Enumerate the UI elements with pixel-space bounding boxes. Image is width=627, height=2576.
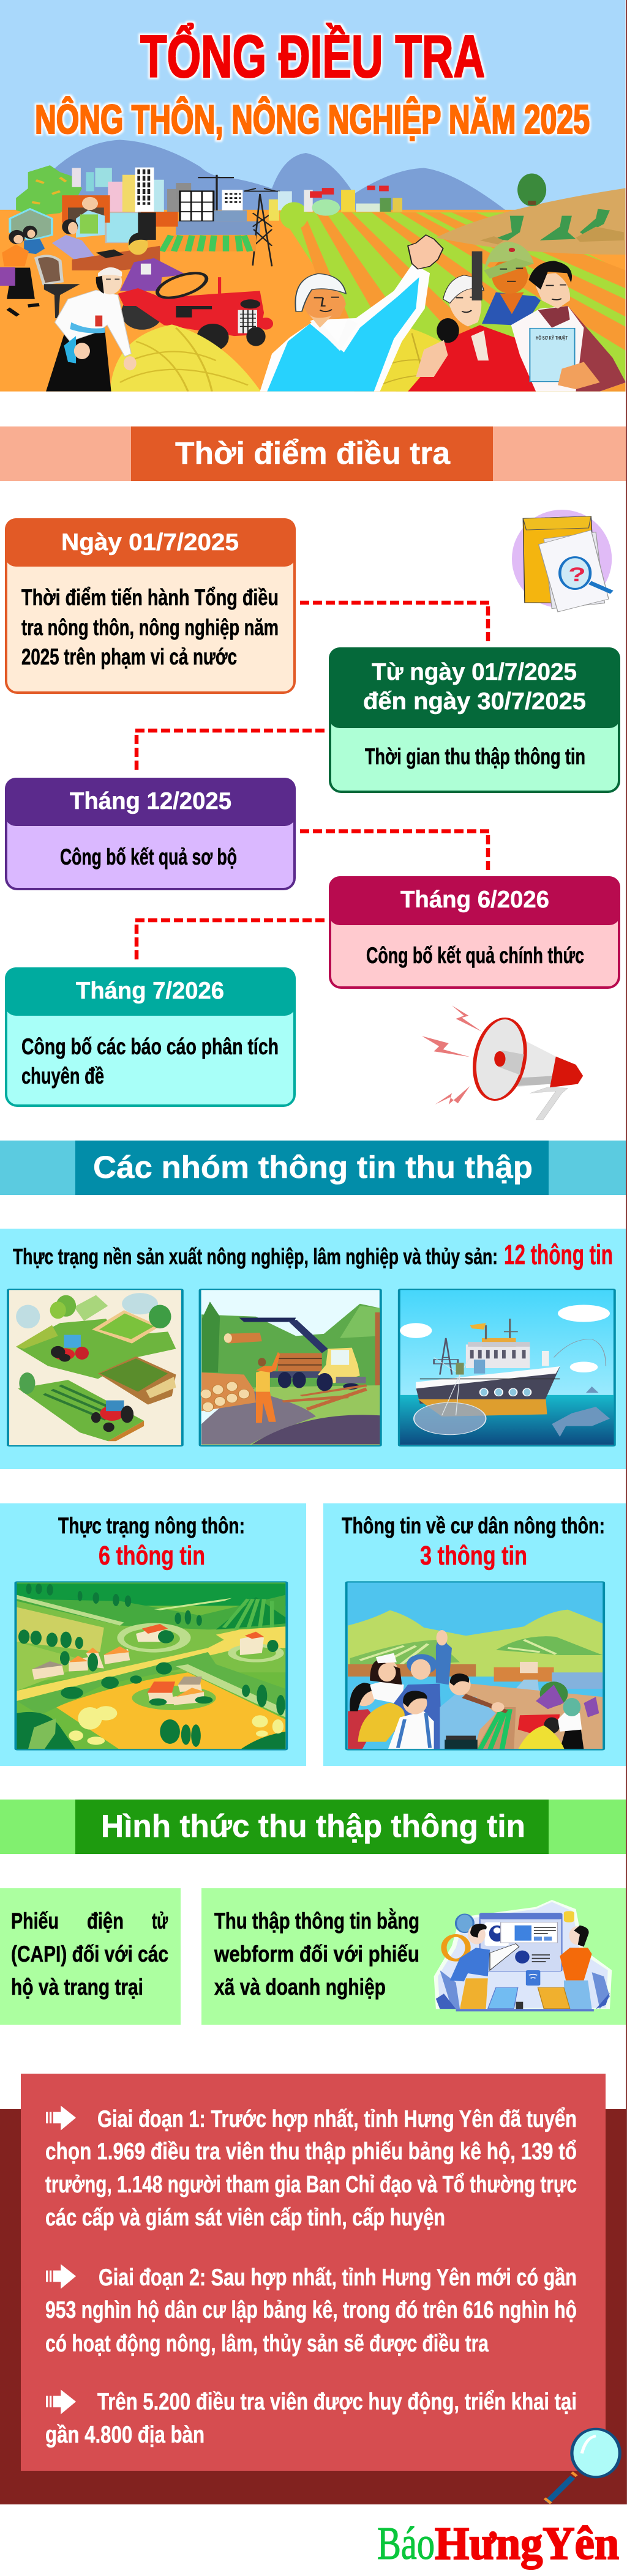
heading band: collection methods bbox=[0, 1800, 626, 1854]
panel: webform: Thu thập thông tin bằng bbox=[214, 1908, 419, 1934]
heading band: information groups bbox=[0, 1141, 626, 1195]
illustration: team with web screens bbox=[434, 1900, 612, 2011]
illustration: fishing ship bbox=[399, 1289, 615, 1446]
icon: arrow 2 bbox=[46, 2264, 76, 2289]
panel: CAPI bbox=[0, 1888, 181, 2025]
connector: dashed line 1 bbox=[300, 603, 490, 643]
panel: webform bbox=[201, 1888, 626, 2025]
card: 7/2026: Tháng 7/2026 bbox=[76, 978, 224, 1004]
illustration: rural residents bbox=[347, 1582, 604, 1750]
card: 01/7/2025: Ngày 01/7/2025 bbox=[61, 529, 239, 556]
icon: envelope with magnifier: ? bbox=[568, 564, 586, 586]
card: 12/2025: Công bố kết quả sơ bộ bbox=[60, 844, 237, 869]
card: 01/7 to 30/7/2025 bbox=[329, 647, 620, 792]
panel: CAPI: Phiếu bbox=[11, 1908, 59, 1934]
text: phase 1: các cấp và giám sát viên cấp tỉnh, cấp huyện bbox=[45, 2205, 445, 2231]
illustration: forestry bbox=[200, 1289, 381, 1446]
panel: rural status 6 info bbox=[0, 1503, 306, 1766]
icon: megaphone bbox=[422, 1005, 583, 1120]
icon: envelope with magnifier bbox=[512, 510, 612, 612]
icon: magnifying glass bbox=[545, 2429, 620, 2503]
illustration: village bbox=[15, 1582, 287, 1750]
card: 01/7/2025 bbox=[5, 518, 296, 693]
text: rural status heading: Thực trạng nông thôn: bbox=[58, 1513, 245, 1538]
illustration: hero banner scene bbox=[0, 0, 627, 393]
panel: webform: webform đối với phiếu bbox=[214, 1941, 419, 1967]
text: phase 2: có hoạt động nông, lâm, thủy sản sẽ được điều tra bbox=[45, 2331, 489, 2357]
connector: dashed line 3 bbox=[300, 831, 490, 871]
icon: arrow 3 bbox=[46, 2389, 76, 2414]
text: phase 2 bbox=[45, 2265, 577, 2357]
panel: CAPI: hộ và trang trại bbox=[11, 1975, 143, 2000]
text: 6 info: 6 thông tin bbox=[99, 1541, 205, 1571]
illustration: farmland bbox=[8, 1289, 182, 1446]
heading band: timing bbox=[0, 426, 626, 481]
panel: rural residents 3 info bbox=[323, 1503, 626, 1766]
logo: Báo Hưng Yên: HưngYên bbox=[435, 2518, 619, 2569]
card: 7/2026: Công bố các báo cáo phân tích bbox=[21, 1034, 279, 1059]
connector: dashed line 4 bbox=[135, 920, 325, 961]
panel: CAPI: điện bbox=[87, 1908, 124, 1934]
panel: CAPI: tử bbox=[152, 1908, 168, 1934]
card: 01/7/2025: 2025 trên phạm vi cả nước bbox=[21, 644, 237, 669]
icon: arrow 1 bbox=[46, 2105, 76, 2131]
card: 12/2025 bbox=[5, 778, 296, 889]
heading band: collection methods: Hình thức thu thập thông tin bbox=[101, 1809, 525, 1844]
title: main heading bbox=[35, 23, 590, 143]
right edge line bbox=[626, 0, 627, 2504]
card: 12/2025: Tháng 12/2025 bbox=[70, 788, 231, 814]
card: 01/7 to 30/7/2025: Từ ngày 01/7/2025 bbox=[372, 659, 577, 685]
heading band: information groups: Các nhóm thông tin thu thập bbox=[93, 1150, 533, 1185]
heading band: timing: Thời điểm điều tra bbox=[175, 436, 451, 471]
text: booklet label: HỒ SƠ KỸ THUẬT bbox=[536, 335, 568, 341]
card: 01/7/2025: tra nông thôn, nông nghiệp năm bbox=[21, 615, 279, 640]
card: 01/7/2025: Thời điểm tiến hành Tổng điều bbox=[21, 585, 279, 610]
band: dark red background bbox=[0, 2109, 626, 2504]
card: 6/2026: Tháng 6/2026 bbox=[400, 887, 549, 913]
connector: dashed line 2 bbox=[135, 731, 325, 770]
panel: CAPI: (CAPI) đối với các bbox=[11, 1941, 168, 1967]
panel: webform: xã và doanh nghiệp bbox=[214, 1975, 386, 2000]
text: 3 info: 3 thông tin bbox=[420, 1541, 527, 1571]
card: 7/2026 bbox=[5, 967, 296, 1106]
card: 7/2026: chuyên đề bbox=[21, 1063, 104, 1089]
panel: figures bbox=[21, 2074, 606, 2471]
text: mobilised enumerators bbox=[45, 2389, 577, 2448]
title: main heading: TỔNG ĐIỀU TRA bbox=[140, 23, 485, 90]
text: phase 1 bbox=[45, 2106, 577, 2231]
card: 6/2026 bbox=[329, 876, 620, 988]
logo: Báo Hưng Yên: Báo bbox=[377, 2518, 435, 2569]
text: mobilised enumerators: gần 4.800 địa bàn bbox=[45, 2422, 205, 2448]
panel: production 12 info bbox=[0, 1229, 626, 1469]
card: 01/7 to 30/7/2025: đến ngày 30/7/2025 bbox=[363, 688, 586, 715]
